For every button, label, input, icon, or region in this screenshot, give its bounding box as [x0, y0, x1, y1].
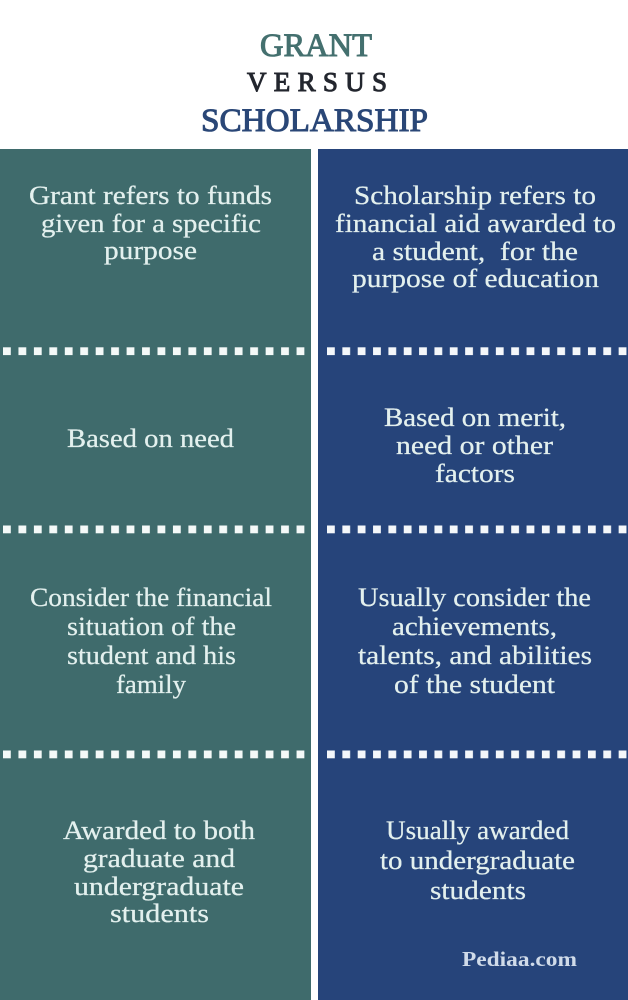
- text: scholarship basis: factors: [435, 459, 515, 488]
- text: scholarship considerations: [358, 583, 592, 699]
- text: grant recipients: undergraduate: [74, 872, 244, 901]
- text: scholarship recipients: to undergraduate: [380, 846, 575, 875]
- text: scholarship considerations: achievements,: [392, 612, 557, 641]
- dotted divider row 1: [0, 347, 628, 355]
- text: scholarship definition: [335, 181, 616, 293]
- text: grant basis: Based on need: [67, 424, 234, 453]
- text: grant definition: purpose: [104, 236, 197, 265]
- dotted divider row 3: [0, 750, 628, 758]
- text: grant definition: given for a specific: [41, 209, 261, 238]
- watermark: Pediaa.com: Pediaa.com: [462, 947, 578, 971]
- text: scholarship recipients: Usually awarded: [386, 816, 569, 845]
- panel: scholarship column: [318, 149, 628, 1000]
- text: grant considerations: situation of the: [67, 612, 236, 641]
- text: scholarship considerations: talents, and abilities: [358, 641, 592, 670]
- text: scholarship recipients: [380, 816, 575, 905]
- text: grant considerations: family: [116, 670, 186, 699]
- text: grant recipients: students: [110, 899, 209, 928]
- text: scholarship basis: need or other: [396, 431, 553, 460]
- text: grant recipients: Awarded to both: [63, 816, 255, 845]
- text: scholarship definition: purpose of education: [352, 264, 599, 293]
- text: scholarship recipients: students: [430, 876, 526, 905]
- text: scholarship definition: a student, for the: [372, 237, 578, 266]
- text: grant definition: Grant refers to funds: [29, 181, 272, 210]
- title: SCHOLARSHIP: [201, 103, 428, 139]
- text: scholarship basis: [384, 403, 566, 488]
- title: GRANT: [260, 28, 372, 64]
- text: grant definition: [29, 181, 272, 265]
- title: [201, 28, 428, 139]
- text: scholarship basis: Based on merit,: [384, 403, 566, 432]
- dotted divider row 2: [0, 526, 628, 533]
- panel: grant column: [0, 149, 311, 1000]
- text: scholarship definition: financial aid awarded to: [335, 209, 616, 238]
- text: scholarship considerations: of the student: [394, 670, 556, 699]
- text: grant recipients: [63, 816, 255, 928]
- text: grant considerations: [30, 583, 272, 699]
- text: scholarship definition: Scholarship refers to: [354, 181, 596, 210]
- text: grant considerations: student and his: [67, 641, 236, 670]
- text: grant considerations: Consider the financial: [30, 583, 272, 612]
- title: VERSUS: [247, 67, 387, 97]
- text: grant recipients: graduate and: [83, 844, 235, 873]
- text: scholarship considerations: Usually consider the: [358, 583, 591, 612]
